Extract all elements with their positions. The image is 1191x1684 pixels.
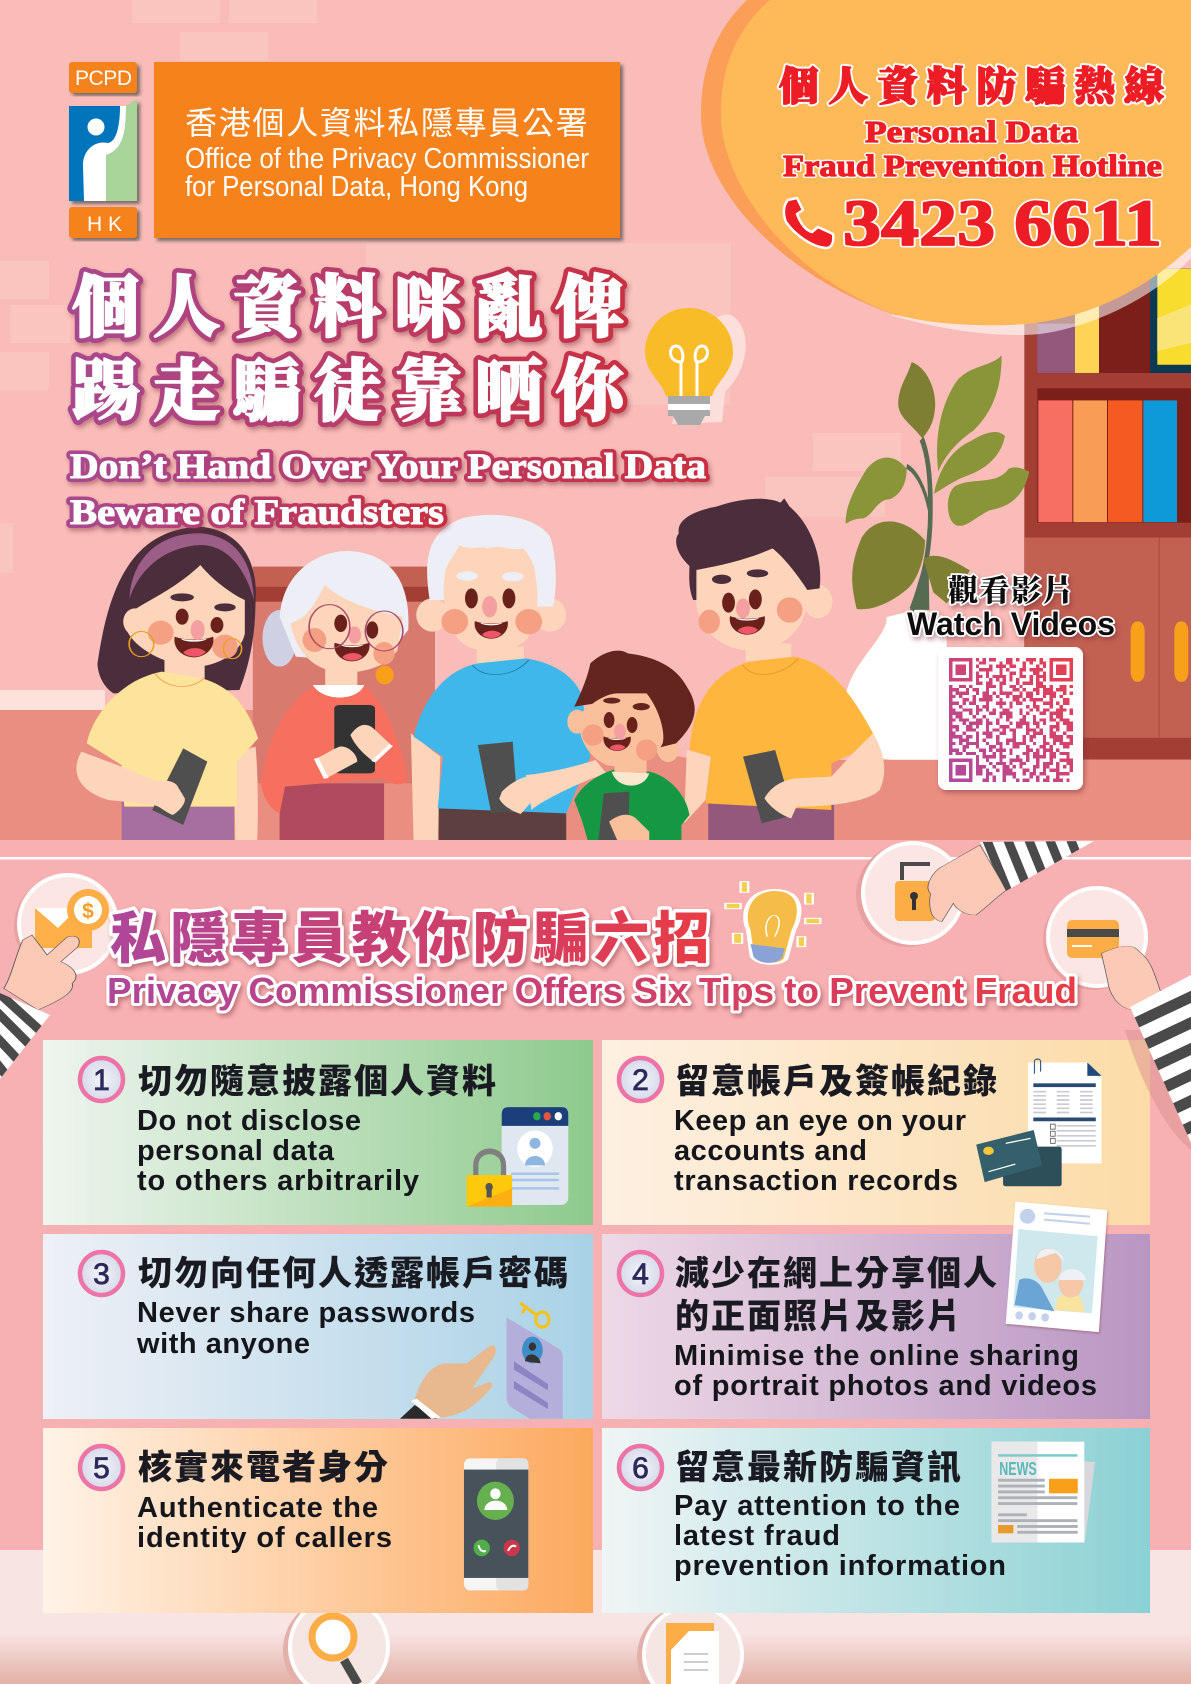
badge 5: 5: [93, 1452, 110, 1485]
sleeve: right striped: [1125, 970, 1191, 1158]
badge 2: 2: [632, 1064, 649, 1097]
hotline heading en: Personal Data: [865, 114, 1079, 149]
tip panel 2: 留意帳戶及簽帳紀錄: [675, 1062, 999, 1101]
label: watch videos: 觀看影片: [948, 574, 1074, 608]
tip panel 5: [43, 1428, 593, 1613]
icon: shared family photo: [1006, 1202, 1107, 1332]
main title en: [70, 446, 706, 532]
organisation name plate: Office of the Privacy Commissioner: [185, 143, 589, 175]
circle icon: padlock: [856, 843, 963, 947]
father: [676, 498, 884, 840]
main title zh: 個人資料咪亂俾: [72, 270, 636, 346]
hotline heading en: Fraud Prevention Hotline: [783, 148, 1162, 183]
tip panel 6: 留意最新防騙資訊: [675, 1448, 963, 1487]
main title zh: [72, 270, 636, 430]
circle icon: envelope and coin: $: [82, 900, 94, 923]
hotline heading zh: 個人資料防騙熱線: [779, 64, 1173, 109]
icon: newspaper: NEWS: [999, 1458, 1037, 1479]
main title en: Beware of Fraudsters: [70, 492, 444, 532]
tip panel 2: transaction records: [674, 1165, 958, 1197]
label: watch videos: Watch Videos: [907, 606, 1115, 642]
hero floor: [0, 710, 1191, 840]
tip panel 1: [43, 1040, 593, 1225]
woman with headband: [76, 527, 258, 840]
badge 1: [80, 1058, 123, 1101]
tip panel 2: accounts and: [674, 1135, 867, 1167]
tip panel 2: [602, 970, 1191, 1225]
logo: PCPD tag: [69, 62, 137, 93]
band below hero: [0, 840, 1191, 857]
main title en: Don’t Hand Over Your Personal Data: [70, 446, 706, 486]
tip panel 6: prevention information: [674, 1550, 1006, 1582]
badge 6: [619, 1446, 662, 1489]
family illustration: [76, 498, 884, 840]
background: upper hero: [0, 0, 1191, 860]
tip panel 4: 的正面照片及影片: [675, 1298, 963, 1336]
hand: right holding card: [1101, 946, 1174, 1040]
footer background: [0, 1550, 1191, 1684]
tip panel 1: 切勿隨意披露個人資料: [138, 1062, 498, 1101]
icon: profile window and padlock: [467, 1107, 568, 1207]
boy: [567, 651, 695, 840]
main title en: Beware of Fraudsters: [70, 492, 444, 532]
hotline heading en: Fraud Prevention Hotline: [783, 148, 1162, 183]
hand: reaching from top: [928, 845, 1006, 922]
main title en: Don’t Hand Over Your Personal Data: [70, 446, 706, 486]
logo: HK tag: H K: [87, 213, 122, 236]
tip panel 3: 切勿向任何人透露帳戶密碼: [138, 1254, 570, 1293]
circle icon: bank card: [1043, 888, 1146, 990]
tip panel 4: 減少在網上分享個人: [675, 1255, 999, 1293]
tip panel 4: of portrait photos and videos: [674, 1370, 1097, 1402]
tip panel 6: [602, 1428, 1150, 1613]
main title zh: 個人資料咪亂俾: [72, 270, 636, 346]
wall skirting strip: [0, 690, 105, 710]
sleeve: left striped: [0, 993, 50, 1079]
plant in white vase: [846, 355, 1029, 760]
badge 5: [80, 1446, 123, 1489]
hotline heading zh: 個人資料防騙熱線: [779, 64, 1173, 109]
icon: smartphone incoming call: [464, 1458, 528, 1590]
tip panel 1: Do not disclose: [137, 1105, 361, 1137]
badge 3: 3: [93, 1258, 110, 1291]
hotline bubble: [701, 0, 1191, 335]
hotline heading en: Personal Data: [865, 114, 1079, 149]
organisation name plate: [154, 62, 620, 238]
phone number: 3423 6611: [843, 187, 1162, 260]
main title zh: 踢走騙徒靠晒你: [72, 354, 636, 430]
icon: light bulb: [645, 308, 746, 425]
sofa: [253, 567, 435, 783]
tip panel 5: identity of callers: [137, 1522, 392, 1554]
icon: newspaper: [992, 1442, 1095, 1543]
badge 4: [619, 1252, 662, 1295]
bookshelf: [1024, 269, 1191, 760]
logo: HK tag: [69, 207, 137, 238]
phone number: 3423 6611: [843, 187, 1162, 260]
tip panel 4: Minimise the online sharing: [674, 1340, 1079, 1372]
bottom circle: magnifier: [283, 1613, 390, 1684]
badge 4: 4: [632, 1258, 649, 1291]
hand: left pointing: [4, 935, 79, 1010]
badge 3: [80, 1252, 123, 1295]
icon: statement and bank cards: [976, 1059, 1102, 1186]
tip panel 3: [43, 1234, 593, 1419]
main title zh: 踢走騙徒靠晒你: [72, 354, 636, 430]
tip panel 1: personal data: [137, 1135, 335, 1167]
background: faint wall blocks: [0, 0, 901, 573]
tip panel 6: Pay attention to the: [674, 1490, 960, 1522]
tip panel 1: to others arbitrarily: [137, 1165, 419, 1197]
QR code: [938, 647, 1083, 790]
badge 6: 6: [632, 1452, 649, 1485]
tip panel 2: Keep an eye on your: [674, 1105, 966, 1137]
circle icon: envelope and coin: [14, 875, 117, 976]
section title en: Privacy Commissioner Offers Six Tips to Prevent Fraud: [107, 970, 1077, 1011]
tip panel 5: Authenticate the: [137, 1492, 378, 1524]
sleeve: top striped: [980, 841, 1094, 891]
organisation name plate: 香港個人資料私隱專員公署: [185, 105, 589, 141]
grandfather: [411, 515, 606, 840]
hotline heading en: [783, 114, 1162, 183]
icon: idea bulb: [725, 882, 820, 964]
grandmother: [261, 551, 408, 840]
tip panel 3: with anyone: [136, 1328, 310, 1360]
tip panel 3: Never share passwords: [137, 1297, 475, 1329]
tip panel 6: latest fraud: [674, 1520, 840, 1552]
phone icon: [784, 198, 833, 248]
logo: PCPD tag: PCPD: [75, 67, 132, 90]
logo: figure emblem: [69, 99, 137, 201]
organisation name plate: for Personal Data, Hong Kong: [185, 171, 528, 203]
tip panel 5: 核實來電者身分: [138, 1448, 390, 1487]
badge 1: 1: [93, 1064, 110, 1097]
section background: [0, 859, 1191, 1551]
bottom circle: document: [637, 1605, 742, 1684]
icon: hand, key and ID card: [400, 1303, 563, 1419]
tip panel 4: [602, 1202, 1150, 1419]
label: watch videos: [907, 574, 1115, 642]
section title zh: 私隱專員教你防騙六招: [110, 907, 714, 970]
badge 2: [619, 1058, 662, 1101]
